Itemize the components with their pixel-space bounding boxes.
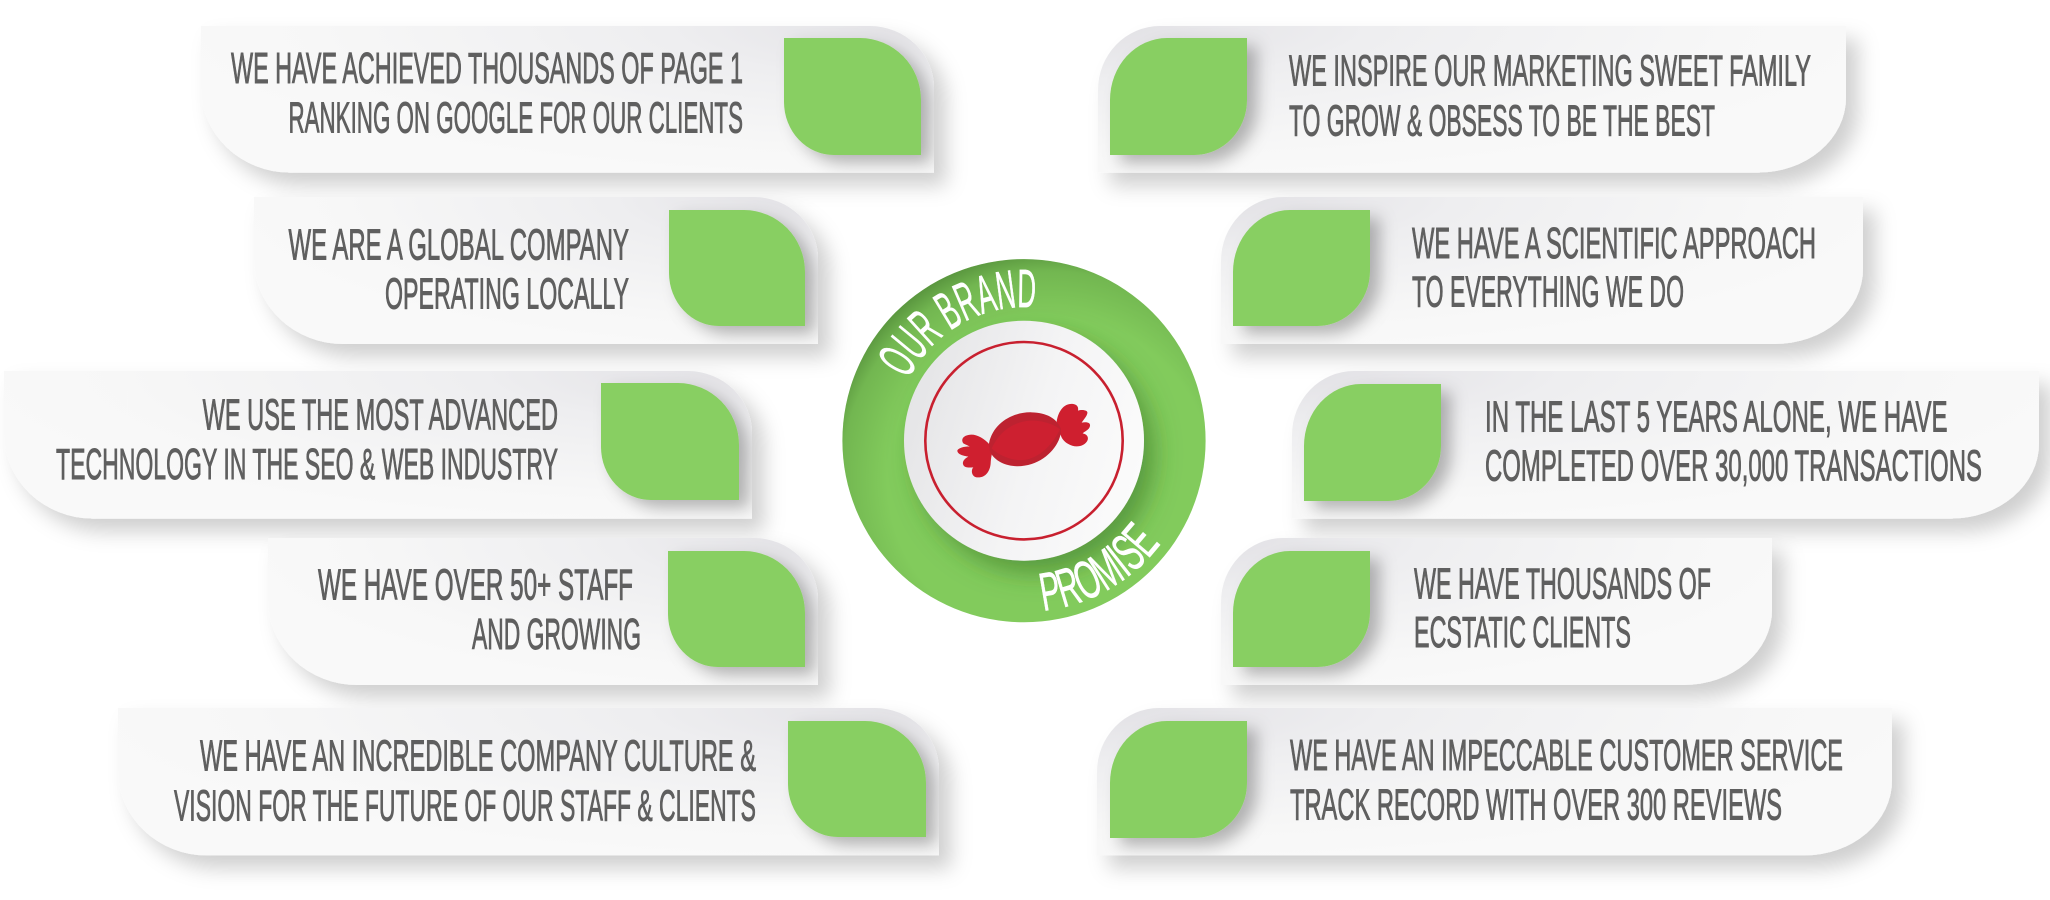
card background <box>1292 371 2039 519</box>
panel: company culture <box>118 708 939 856</box>
red ring <box>925 342 1123 539</box>
text block: WE ARE A GLOBAL COMPANY <box>288 221 629 269</box>
panel: marketing sweet family <box>1098 26 1846 173</box>
card background <box>4 371 752 519</box>
card background <box>201 26 934 173</box>
card background <box>268 538 818 685</box>
text block: OPERATING LOCALLY <box>385 270 629 318</box>
icon: green leaf <box>1233 210 1370 326</box>
green ring <box>842 259 1206 622</box>
icon: green leaf <box>1110 721 1247 838</box>
central badge: our brand promise <box>842 259 1206 622</box>
icon: green leaf <box>788 721 926 837</box>
text block <box>318 561 641 659</box>
text block <box>231 45 743 143</box>
card background <box>1097 708 1892 856</box>
text block: TECHNOLOGY IN THE SEO & WEB INDUSTRY <box>56 441 558 489</box>
panel: transactions <box>1292 371 2039 519</box>
card background <box>1098 26 1846 173</box>
text block <box>1412 220 1816 317</box>
text block: ECSTATIC CLIENTS <box>1414 609 1631 657</box>
card background <box>118 708 939 856</box>
icon: green leaf <box>1233 551 1370 667</box>
icon: green leaf <box>1304 384 1441 501</box>
panel: staff <box>268 538 818 685</box>
panel: page 1 rankings <box>201 26 934 173</box>
text block <box>56 391 558 489</box>
text block: VISION FOR THE FUTURE OF OUR STAFF & CLIENTS <box>174 782 756 830</box>
white plate <box>904 321 1144 561</box>
icon: green leaf <box>668 551 805 667</box>
panel: advanced technology <box>4 371 752 519</box>
text block: AND GROWING <box>472 611 641 659</box>
text block <box>174 733 756 830</box>
panel: ecstatic clients <box>1221 538 1772 685</box>
panel: scientific approach <box>1221 197 1863 344</box>
text block: WE HAVE OVER 50+ STAFF <box>318 561 633 609</box>
text block: WE HAVE AN INCREDIBLE COMPANY CULTURE & <box>200 733 756 781</box>
text block <box>1289 48 1811 145</box>
curved heading: our brand: OUR BRAND <box>880 270 1035 374</box>
icon: green leaf <box>784 38 921 155</box>
text block: WE HAVE ACHIEVED THOUSANDS OF PAGE 1 <box>231 45 743 93</box>
card background <box>254 197 818 344</box>
icon: red candy <box>957 404 1090 477</box>
curved heading: promise: PROMISE <box>1039 520 1160 611</box>
text block: RANKING ON GOOGLE FOR OUR CLIENTS <box>288 95 743 143</box>
panel: customer service <box>1097 708 1892 856</box>
icon: green leaf <box>601 383 739 500</box>
text block: WE USE THE MOST ADVANCED <box>203 391 558 439</box>
icon: green leaf <box>669 210 805 326</box>
text block: TO EVERYTHING WE DO <box>1412 269 1684 317</box>
card background <box>1221 197 1863 344</box>
text block <box>1290 732 1843 830</box>
icon: green leaf <box>1110 38 1247 155</box>
text block <box>1414 561 1711 657</box>
text block <box>1485 394 1982 491</box>
panel: global company <box>254 197 818 344</box>
text block <box>288 221 629 318</box>
card background <box>1221 538 1772 685</box>
text block: WE HAVE THOUSANDS OF <box>1414 561 1711 609</box>
